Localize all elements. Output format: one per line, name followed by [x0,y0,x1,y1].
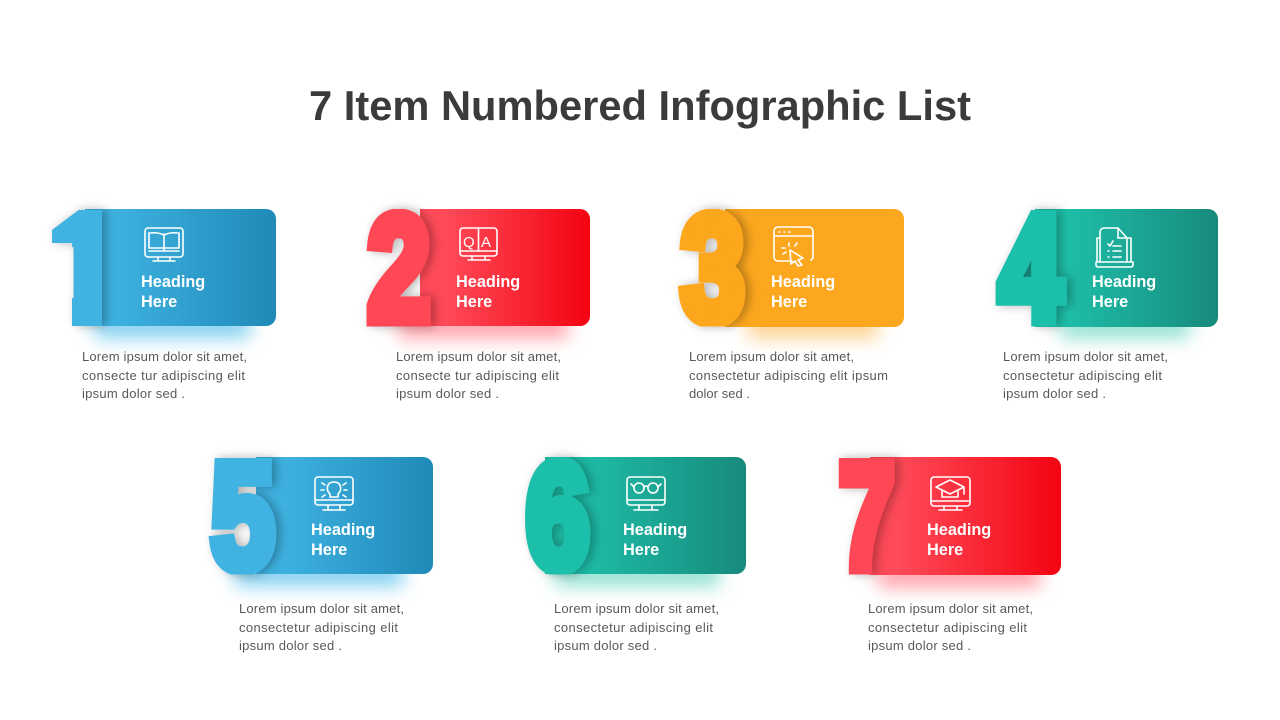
number: 6 [526,433,589,601]
panel: item 2 [368,185,590,401]
number: 2 [368,185,430,353]
description [396,349,561,401]
glow [398,314,568,338]
heading: Heading [141,273,205,291]
icon: Q and A on monitor [460,228,497,260]
heading: Heading [311,521,375,539]
card [256,457,433,574]
glow [555,562,720,586]
description: Lorem ipsum dolor sit amet, [396,349,561,364]
panel: item 3 [681,185,904,401]
icon: light bulb on monitor [315,477,353,510]
description: dolor sed . [689,386,750,401]
panel: item 1 [49,184,276,401]
icon: graduation cap on monitor [931,477,970,510]
panel: item 6 [526,433,746,653]
description: Lorem ipsum dolor sit amet, [1003,349,1168,364]
description: ipsum dolor sed . [554,638,657,653]
card [545,457,746,574]
icon: Q and A on monitor: A [481,234,491,251]
description: ipsum dolor sed . [82,386,185,401]
description: Lorem ipsum dolor sit amet, [689,349,854,364]
card [725,209,904,327]
description [239,601,404,653]
description: Lorem ipsum dolor sit amet, [554,601,719,616]
description: consecte tur adipiscing elit [396,368,559,383]
description: consectetur adipiscing elit [1003,368,1162,383]
heading: Heading [456,273,520,291]
card [870,457,1061,575]
description: consecte tur adipiscing elit [82,368,245,383]
heading: Here [927,541,963,559]
number counter fill [1010,235,1036,290]
heading: Heading [1092,273,1156,291]
number: 4 [999,185,1062,353]
description: consectetur adipiscing elit [868,620,1027,635]
glow [235,562,403,586]
card [420,209,590,326]
heading: Here [771,293,807,311]
description: consectetur adipiscing elit [239,620,398,635]
description: ipsum dolor sed . [1003,386,1106,401]
description [554,601,719,653]
title: 7 Item Numbered Infographic List [309,82,971,129]
description: ipsum dolor sed . [396,386,499,401]
icon: browser window with cursor [774,227,813,266]
icon: document on laptop [1096,228,1133,267]
number: 5 [211,433,274,601]
card [1035,209,1218,327]
glow [1060,314,1190,338]
heading: Heading [623,521,687,539]
card [85,209,276,326]
panel: item 4 [999,185,1218,401]
icon: Q and A on monitor: Q [463,234,475,251]
heading: Here [623,541,659,559]
number: 1 [49,184,121,352]
panel: item 7 [839,434,1061,653]
description: Lorem ipsum dolor sit amet, [82,349,247,364]
description [689,349,888,401]
description [82,349,247,401]
heading: Here [311,541,347,559]
panel: item 5 [211,433,433,653]
description: consectetur adipiscing elit ipsum [689,368,888,383]
description: Lorem ipsum dolor sit amet, [239,601,404,616]
number: 7 [839,434,895,601]
heading: Heading [771,273,835,291]
icon: book on monitor [145,228,183,261]
icon: glasses on monitor [627,477,665,510]
description [1003,349,1168,401]
number: 3 [681,185,744,353]
glow [878,563,1040,587]
glow [95,314,250,338]
description: ipsum dolor sed . [239,638,342,653]
description: Lorem ipsum dolor sit amet, [868,601,1033,616]
heading: Heading [927,521,991,539]
heading: Here [1092,293,1128,311]
description [868,601,1033,653]
glow [748,314,878,338]
heading: Here [456,293,492,311]
description: consectetur adipiscing elit [554,620,713,635]
description: ipsum dolor sed . [868,638,971,653]
heading: Here [141,293,177,311]
